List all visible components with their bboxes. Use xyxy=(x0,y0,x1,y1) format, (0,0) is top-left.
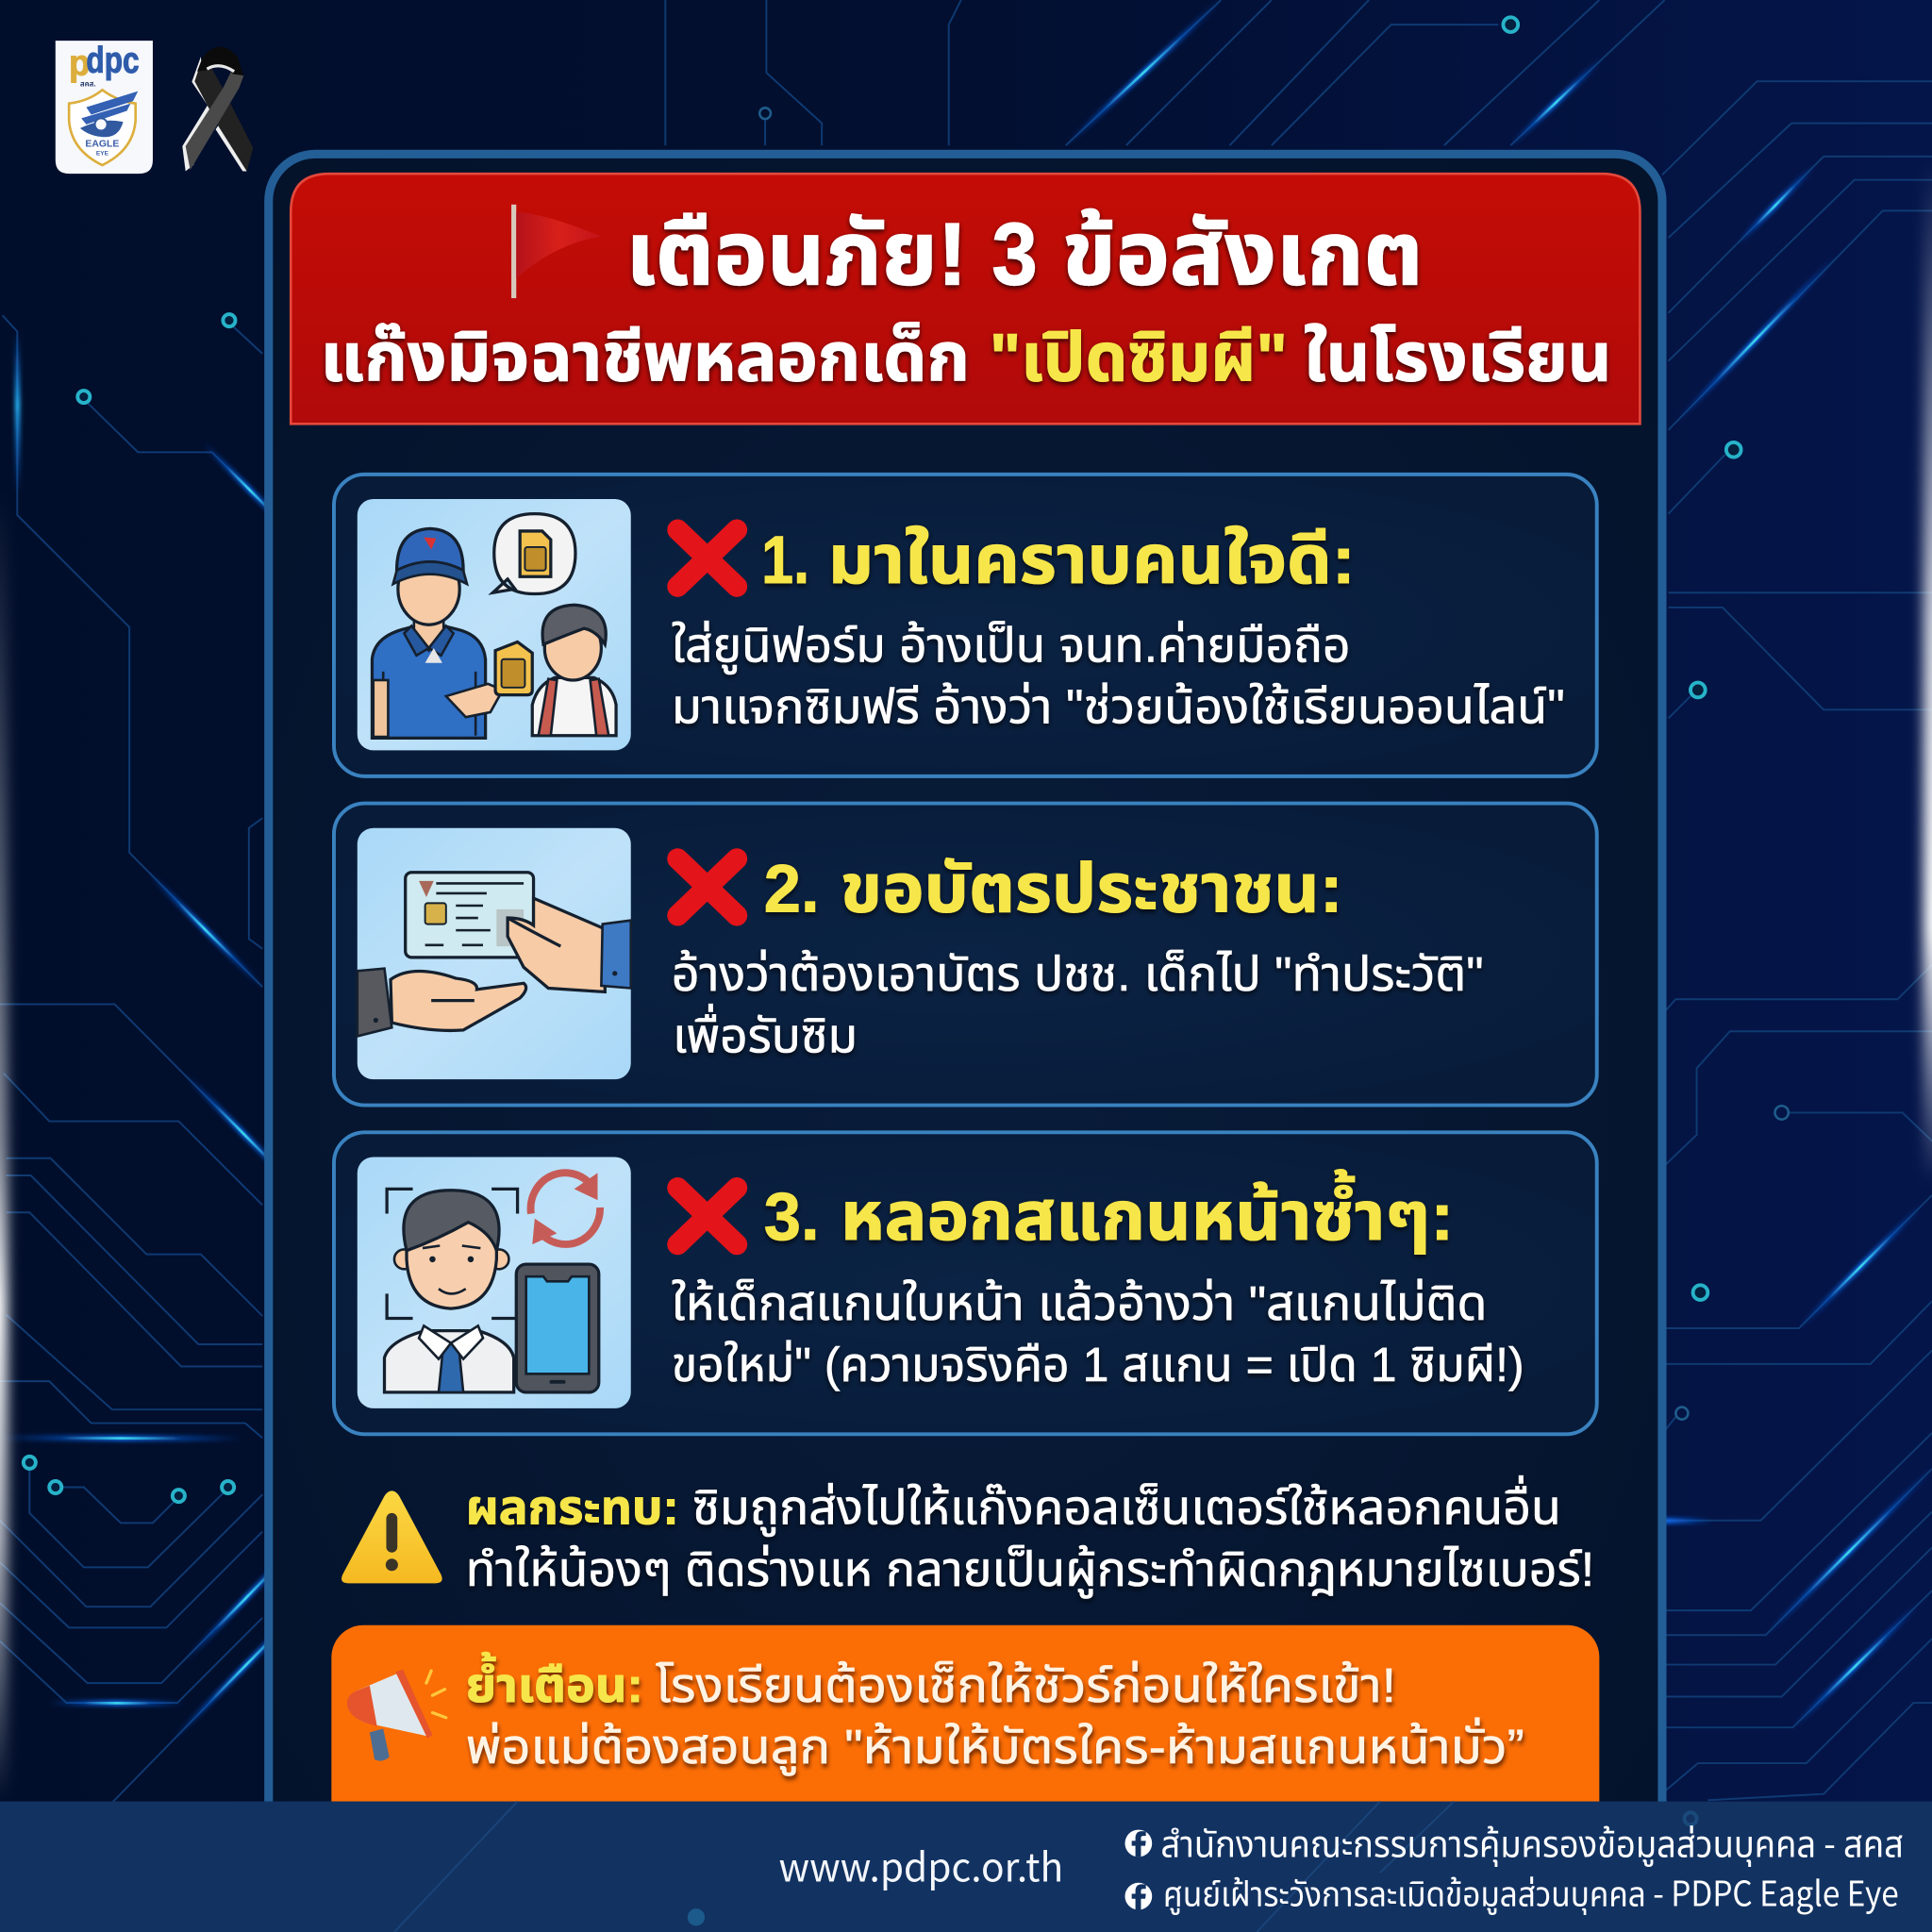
icon: megaphone xyxy=(347,1670,446,1761)
card 1 body: ใส่ยูนิฟอร์ม อ้างเป็น จนท.ค่ายมือถือ xyxy=(672,618,1351,675)
logo: PDPC Eagle Eye badge: EYE xyxy=(96,151,109,158)
card 3 body xyxy=(672,1276,1524,1391)
card 2 body: อ้างว่าต้องเอาบัตร ปชช. เด็กไป "ทำประวัติ" xyxy=(672,947,1484,1001)
logo: PDPC Eagle Eye badge: สคส. xyxy=(80,79,96,88)
reminder text xyxy=(466,1652,1524,1776)
card 2 body xyxy=(672,947,1484,1062)
card 2 heading: 2. xyxy=(764,852,820,927)
card 1 heading: 1. xyxy=(761,523,809,598)
card 3: repeated face scans xyxy=(334,1132,1597,1434)
title line 2: "เปิดซิมผี" xyxy=(990,321,1288,396)
reminder text: พ่อแม่ต้องสอนลูก "ห้ามให้บัตรใคร-ห้ามสแกนหน้ามั่ว” xyxy=(466,1717,1524,1776)
impact text: ผลกระทบ: xyxy=(466,1481,679,1535)
title line 1 xyxy=(626,205,1424,304)
panel: red title banner xyxy=(291,174,1640,424)
title line 2 xyxy=(321,321,1611,396)
circuit nodes xyxy=(24,17,1741,1502)
card 1 body xyxy=(672,618,1565,734)
card 3 body: ขอใหม่" (ความจริงคือ 1 สแกน = เปิด 1 ซิมผี!) xyxy=(672,1338,1524,1391)
logo: PDPC Eagle Eye badge xyxy=(56,41,153,174)
illustration: uniformed man offering SIM to student xyxy=(358,499,631,750)
card 1: good-guy disguise xyxy=(334,475,1597,776)
title line 1: เตือนภัย! xyxy=(626,205,967,304)
panel: orange reminder callout xyxy=(331,1625,1599,1872)
logo: PDPC Eagle Eye badge: dpc xyxy=(86,41,140,81)
white edge glows xyxy=(0,492,8,1802)
reminder text: ย้ำเตือน: xyxy=(466,1652,643,1712)
title line 2: แก๊งมิจฉาชีพหลอกเด็ก xyxy=(321,321,970,396)
main panel xyxy=(269,154,1662,1932)
card 3 heading: 3. xyxy=(764,1179,820,1255)
website: www.pdpc.or.th xyxy=(778,1837,1063,1893)
illustration: handing over an ID card xyxy=(358,828,631,1079)
icon: black mourning ribbon xyxy=(182,47,253,172)
card 2 body: เพื่อรับซิม xyxy=(673,1003,858,1062)
title line 1: ข้อสังเกต xyxy=(1062,205,1424,304)
card 1 body: มาแจกซิมฟรี อ้างว่า "ช่วยน้องใช้เรียนออนไลน์" xyxy=(672,680,1565,734)
title line 1: 3 xyxy=(991,205,1038,304)
card 2 heading: ขอบัตรประชาชน: xyxy=(841,852,1343,927)
impact text: ทำให้น้องๆ ติดร่างแห กลายเป็นผู้กระทำผิดกฎหมายไซเบอร์! xyxy=(466,1542,1594,1599)
card 1 heading: มาในคราบคนใจดี: xyxy=(828,523,1356,598)
logo: PDPC Eagle Eye badge: p xyxy=(69,44,90,84)
card 3 heading: หลอกสแกนหน้าซ้ำๆ: xyxy=(841,1169,1454,1255)
icon: red X xyxy=(677,858,737,915)
icon: red flag xyxy=(511,205,601,298)
card 3 body: ให้เด็กสแกนใบหน้า แล้วอ้างว่า "สแกนไม่ติด xyxy=(672,1276,1487,1330)
icon: red X xyxy=(677,530,737,587)
icon: warning triangle xyxy=(341,1491,442,1583)
logo: PDPC Eagle Eye badge: EAGLE xyxy=(85,139,119,149)
card 2: asks for ID card xyxy=(334,804,1597,1106)
title line 2: ในโรงเรียน xyxy=(1304,321,1611,396)
reminder text: โรงเรียนต้องเช็กให้ชัวร์ก่อนให้ใครเข้า! xyxy=(656,1658,1396,1712)
illustration: face scan with phone xyxy=(358,1157,631,1408)
impact text: ซิมถูกส่งไปให้แก๊งคอลเซ็นเตอร์ใช้หลอกคนอื่น xyxy=(692,1475,1561,1538)
footer bar xyxy=(0,1802,1932,1932)
impact text xyxy=(466,1475,1594,1599)
icon: red X xyxy=(677,1188,737,1244)
impact warning xyxy=(341,1475,1594,1599)
